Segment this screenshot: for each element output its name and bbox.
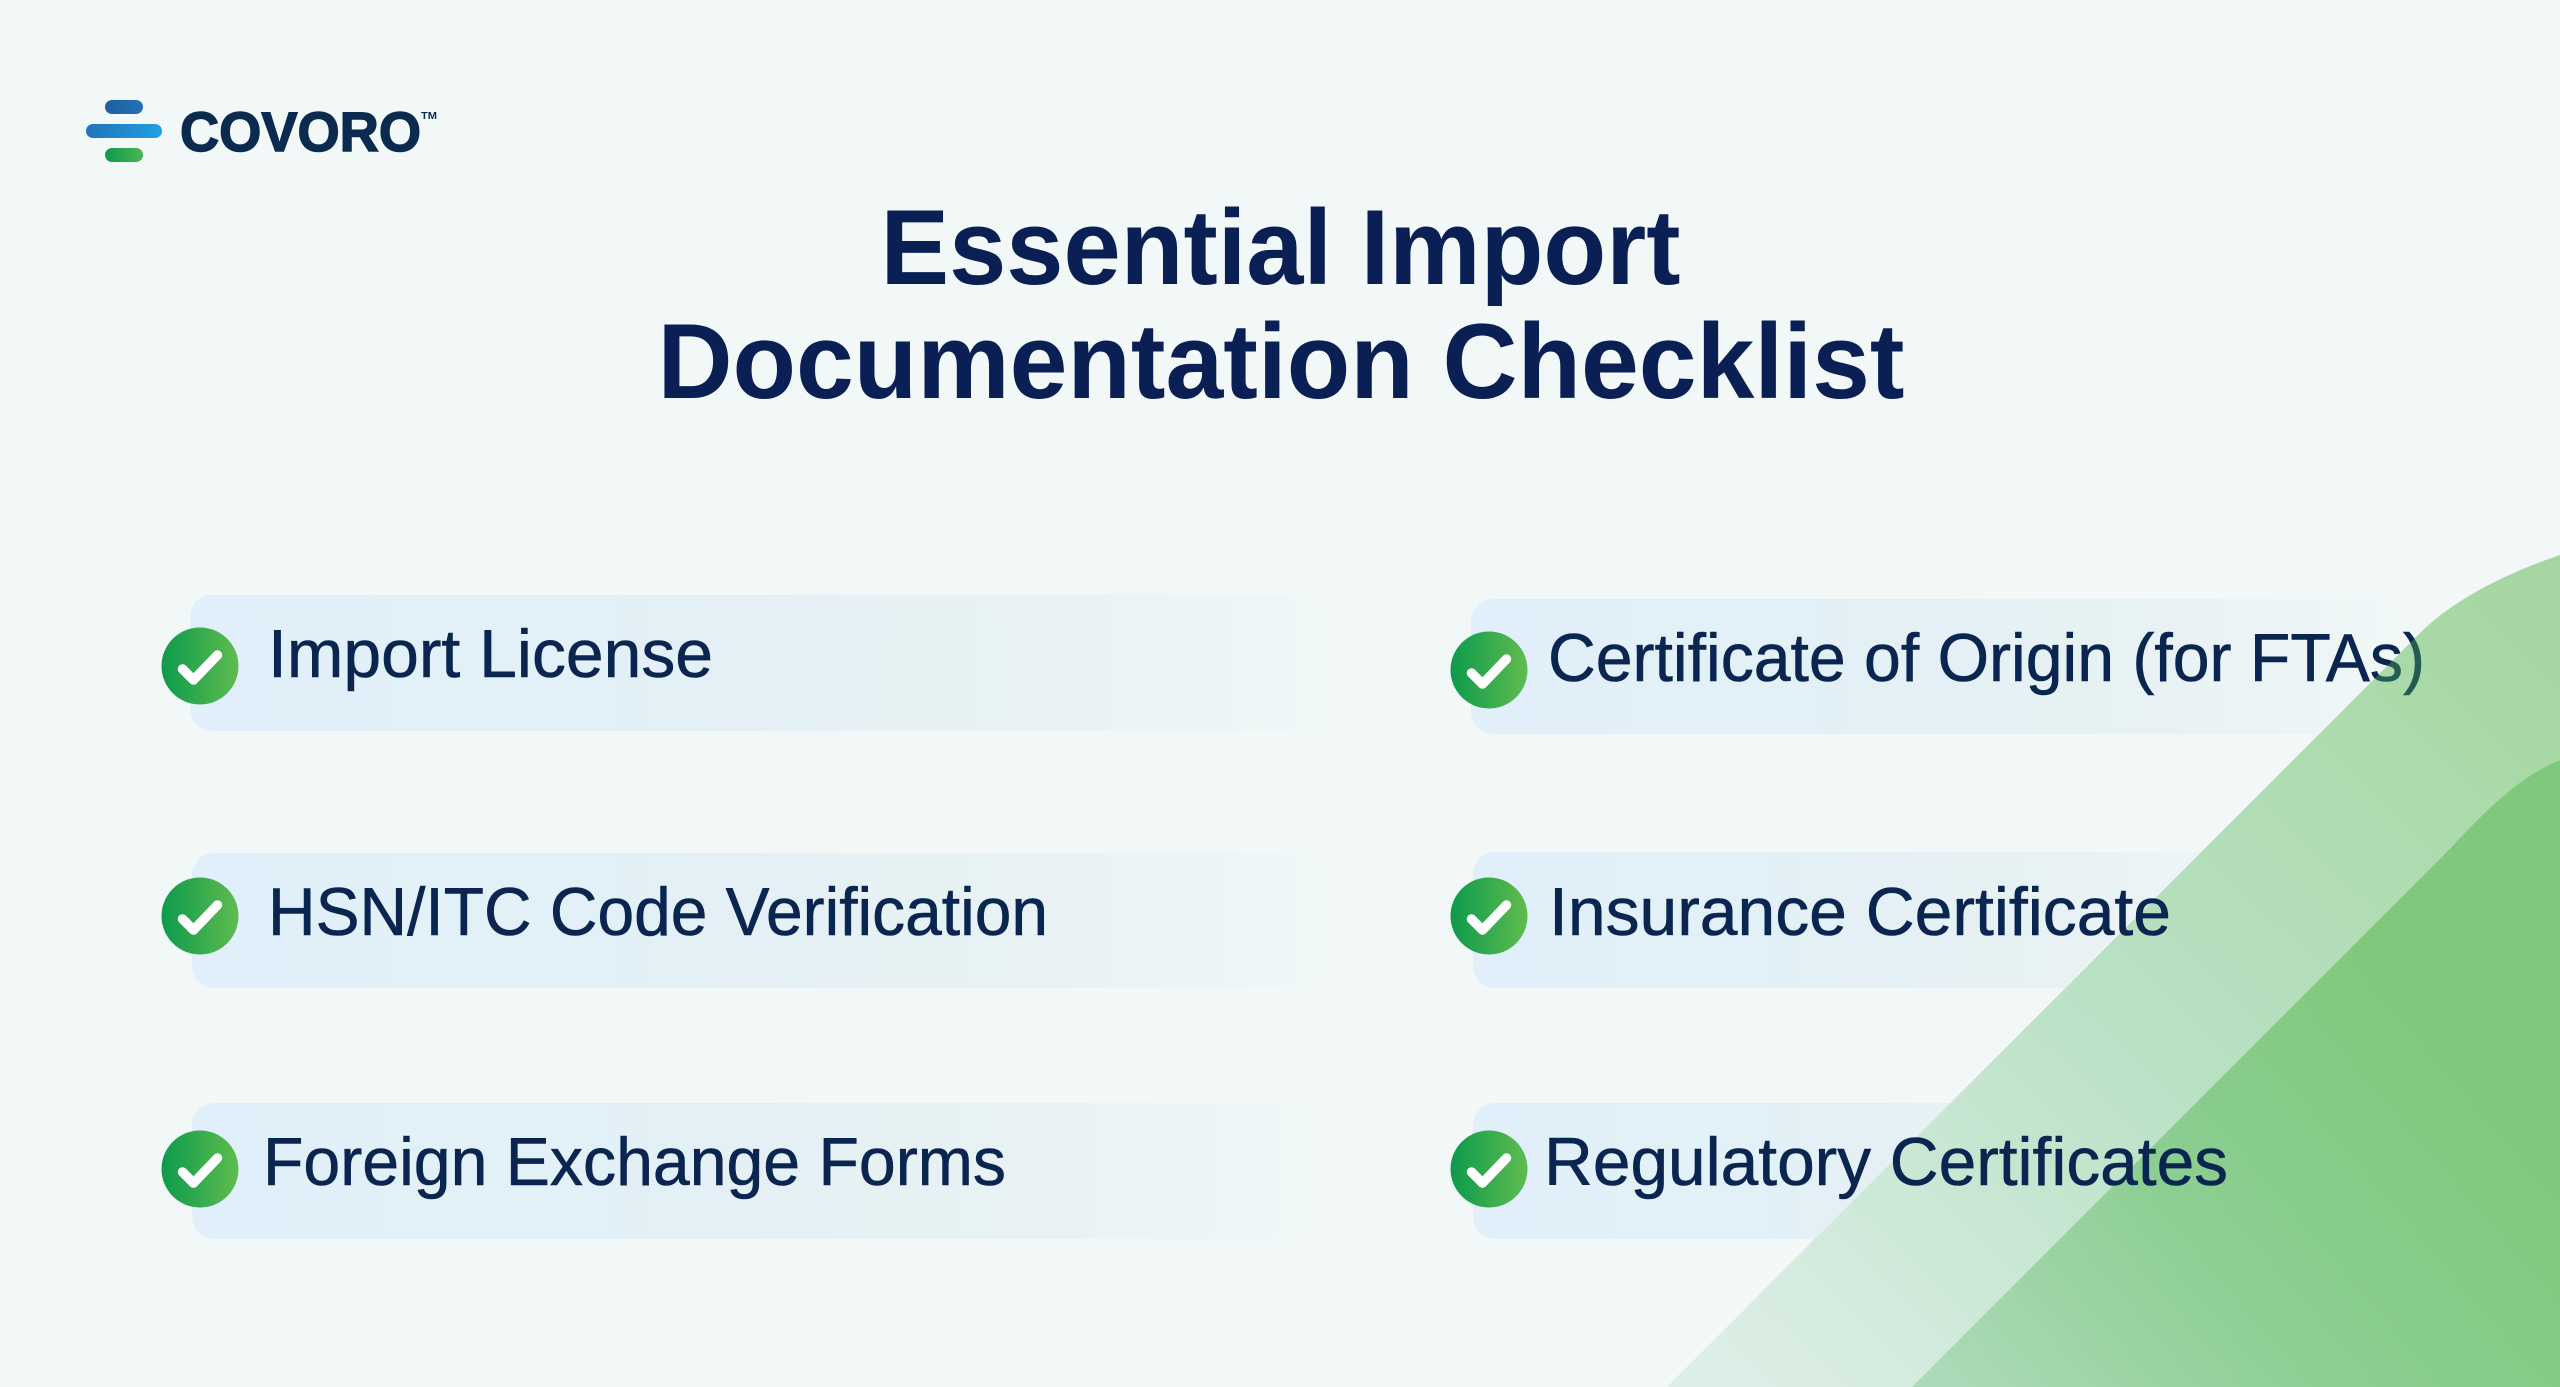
label: HSN/ITC Code Verification (268, 874, 1048, 950)
checklist item: Certificate of Origin (1450, 599, 2425, 734)
row bar (1471, 599, 2400, 734)
row bar (1473, 1103, 1950, 1239)
icon: logo bars (86, 100, 162, 162)
row bar (192, 1103, 1306, 1239)
checklist item: Foreign Exchange Forms (162, 1103, 1306, 1239)
trademark: TM (421, 110, 437, 122)
label: Regulatory Certificates (1544, 1124, 2228, 1200)
decorative green shapes (1667, 555, 2560, 1387)
row bar (1473, 852, 2178, 988)
label: Certificate of Origin (for FTAs) (1548, 620, 2425, 696)
icon: check (162, 1130, 238, 1208)
icon: check (162, 878, 238, 954)
checklist item: Import License (162, 595, 1326, 731)
row bar (190, 595, 1326, 731)
icon: check (162, 628, 238, 704)
row bar (192, 853, 1322, 988)
title: Essential Import (880, 187, 1680, 307)
title (658, 187, 1904, 421)
label: Insurance Certificate (1549, 874, 2171, 950)
icon: check (1450, 878, 1528, 954)
checklist item: Regulatory Certificates (1450, 1103, 2273, 1239)
checklist item: HSN/ITC Code Verification (162, 853, 1322, 988)
title: Documentation Checklist (658, 301, 1904, 421)
logo wordmark: COVORO (180, 100, 421, 163)
logo: Covoro (86, 100, 437, 163)
icon: check (1450, 632, 1528, 708)
label: Import License (268, 616, 713, 692)
icon: check (1450, 1130, 1528, 1208)
checklist item: Insurance Certificate (1450, 852, 2178, 988)
label: Foreign Exchange Forms (263, 1124, 1006, 1200)
